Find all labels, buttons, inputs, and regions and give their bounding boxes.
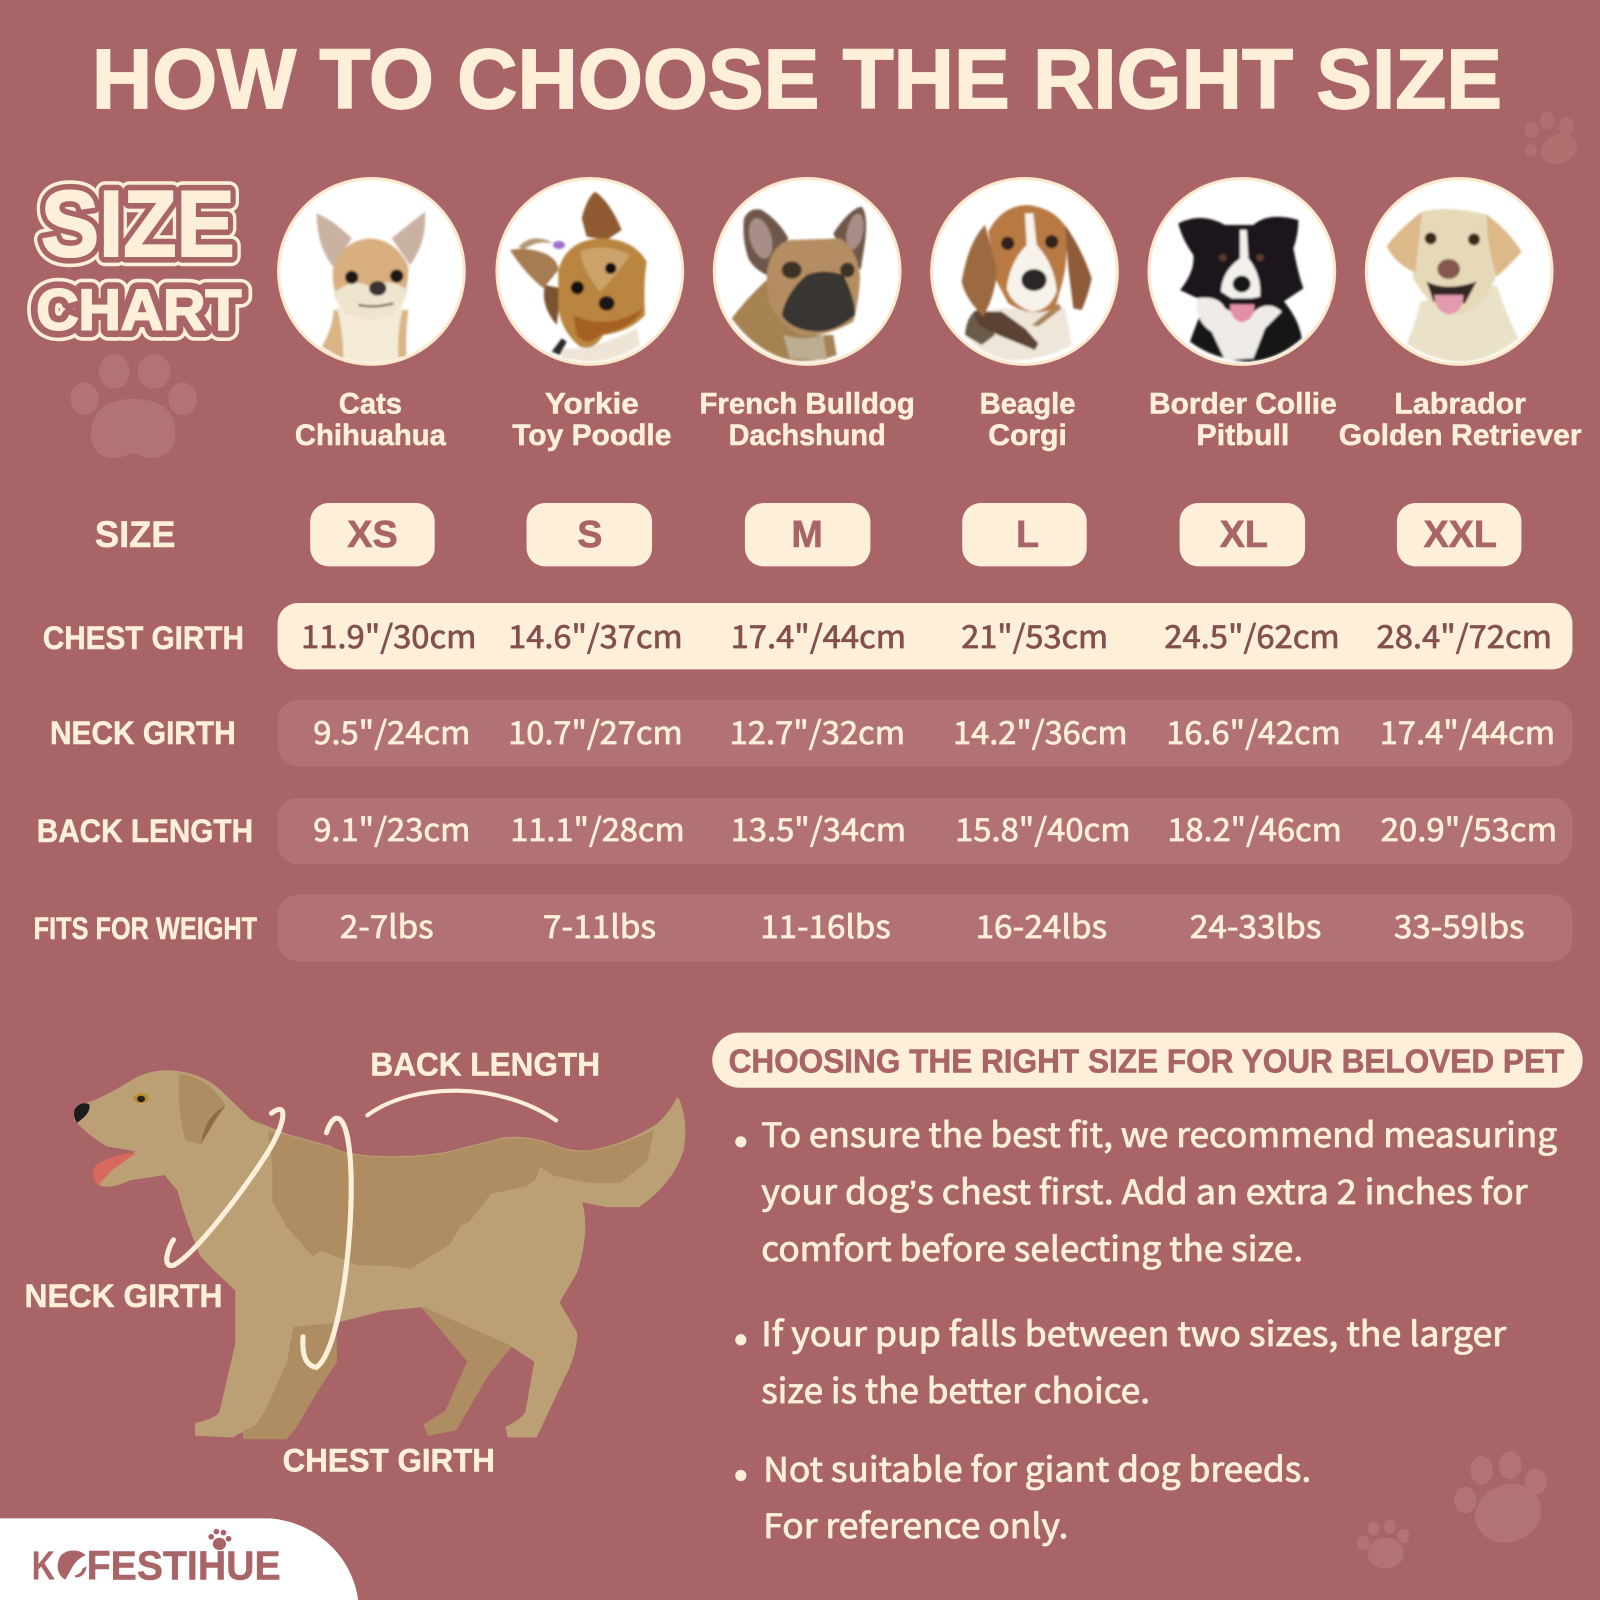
row: fits for weight: 7-11lbs [543,902,656,948]
row: fits for weight: FITS FOR WEIGHT [34,910,257,946]
breed labels: Corgi [988,419,1067,452]
breed labels: Chihuahua [295,419,446,452]
logo: FESTIHUE [87,1543,281,1589]
row: fits for weight: 11-16lbs [760,902,891,948]
row: chest girth: 24.5"/62cm [1164,612,1340,658]
breed labels: Golden Retriever [1339,419,1582,452]
breed labels [295,387,1582,452]
dog measurement illustration [24,1046,684,1478]
row: chest girth: 17.4"/44cm [731,612,906,658]
size chart badge: CHART [36,279,241,343]
row: neck girth: 14.2"/36cm [953,708,1128,754]
row: neck girth: 10.7"/27cm [508,708,683,754]
breed labels: French Bulldog [699,387,915,420]
row: neck girth: NECK GIRTH [50,714,236,751]
advice bullet 3: Not suitable for giant dog breeds. [763,1443,1311,1492]
row: neck girth: 16.6"/42cm [1166,708,1341,754]
breed labels: Dachshund [729,419,886,452]
portrait: yorkie [497,179,683,364]
label: neck girth: NECK GIRTH [24,1277,222,1314]
icon: paw left [70,354,197,458]
size row: XL [1220,513,1268,555]
breed labels: Yorkie [545,387,639,420]
advice bullet 3: For reference only. [763,1499,1068,1548]
row: chest girth [43,603,1572,669]
row: back length: 11.1"/28cm [510,805,685,851]
label: back length: BACK LENGTH [370,1046,600,1083]
row: fits for weight [34,895,1572,961]
advice bullet 1 [735,1108,1557,1271]
row: back length: 15.8"/40cm [955,805,1131,851]
advice bullet 1: To ensure the best fit, we recommend measuring [761,1108,1557,1157]
breed labels: Toy Poodle [512,419,671,452]
row: neck girth: 17.4"/44cm [1380,708,1555,754]
advice bullet 2: If your pup falls between two sizes, the larger [761,1307,1507,1356]
size row [95,503,1521,566]
portrait: french bulldog [714,179,900,364]
row: back length [37,798,1572,864]
row: chest girth: 14.6"/37cm [508,612,683,658]
portrait: border collie [1149,179,1335,364]
logo: K [32,1543,56,1589]
row: neck girth: 12.7"/32cm [730,708,905,754]
size row: L [1016,513,1039,555]
size row: XXL [1423,513,1497,555]
row: neck girth [50,700,1572,766]
ring: neck girth [167,1109,283,1266]
label: chest girth: CHEST GIRTH [283,1441,495,1478]
row: back length: 18.2"/46cm [1167,805,1342,851]
row: back length: 13.5"/34cm [731,805,906,851]
advice bullet 3 [735,1443,1311,1548]
row: fits for weight: 24-33lbs [1190,902,1321,948]
row: neck girth: 9.5"/24cm [313,708,470,754]
portrait: labrador [1366,179,1552,364]
icon: paw bottom right small [1357,1519,1409,1568]
size chart badge: SIZE [41,171,235,276]
icon: paw top right [1524,111,1581,169]
size chart badge [36,171,241,343]
portrait: beagle [932,179,1117,364]
advice heading pill: CHOOSING THE RIGHT SIZE FOR YOUR BELOVED PET [729,1043,1565,1080]
row: chest girth: 11.9"/30cm [301,612,477,658]
row: fits for weight: 33-59lbs [1394,902,1524,948]
breed labels: Cats [339,387,402,420]
size row: M [791,513,823,555]
size chart badge: CHART [36,279,241,343]
row: fits for weight: 2-7lbs [340,902,434,948]
advice bullet 1: your dog ’s chest first. Add an extra 2 inches for [761,1165,1529,1214]
size row: SIZE [95,514,176,555]
breed labels: Border Collie [1149,387,1337,420]
advice heading pill [712,1033,1583,1088]
row: fits for weight: 16-24lbs [976,902,1107,948]
row: back length: 9.1"/23cm [313,805,470,851]
row: chest girth: 28.4"/72cm [1377,612,1552,658]
icon: paw bottom right large [1454,1451,1550,1552]
logo [0,1518,358,1600]
row: back length: 20.9"/53cm [1381,805,1557,851]
title: HOW TO CHOOSE THE RIGHT SIZE [92,31,1502,126]
advice bullet 2: size is the better choice. [761,1364,1150,1413]
size chart badge: SIZE [41,171,235,276]
ring: chest girth [303,1118,351,1367]
arc: back length [367,1091,556,1120]
size row: S [577,513,602,555]
breed labels: Pitbull [1196,419,1289,452]
row: chest girth: CHEST GIRTH [43,619,244,656]
size chart badge: CHART [36,279,241,343]
breed labels: Labrador [1394,387,1527,420]
size row: XS [347,513,398,555]
advice bullet 2 [735,1307,1507,1413]
portrait: chihuahua [279,179,464,364]
size chart badge: SIZE [41,171,235,276]
breed labels: Beagle [980,387,1076,420]
advice bullet 1: comfort before selecting the size. [761,1222,1303,1271]
row: back length: BACK LENGTH [37,812,253,849]
logo icon: dog face [58,1551,87,1580]
row: chest girth: 21"/53cm [961,612,1108,658]
